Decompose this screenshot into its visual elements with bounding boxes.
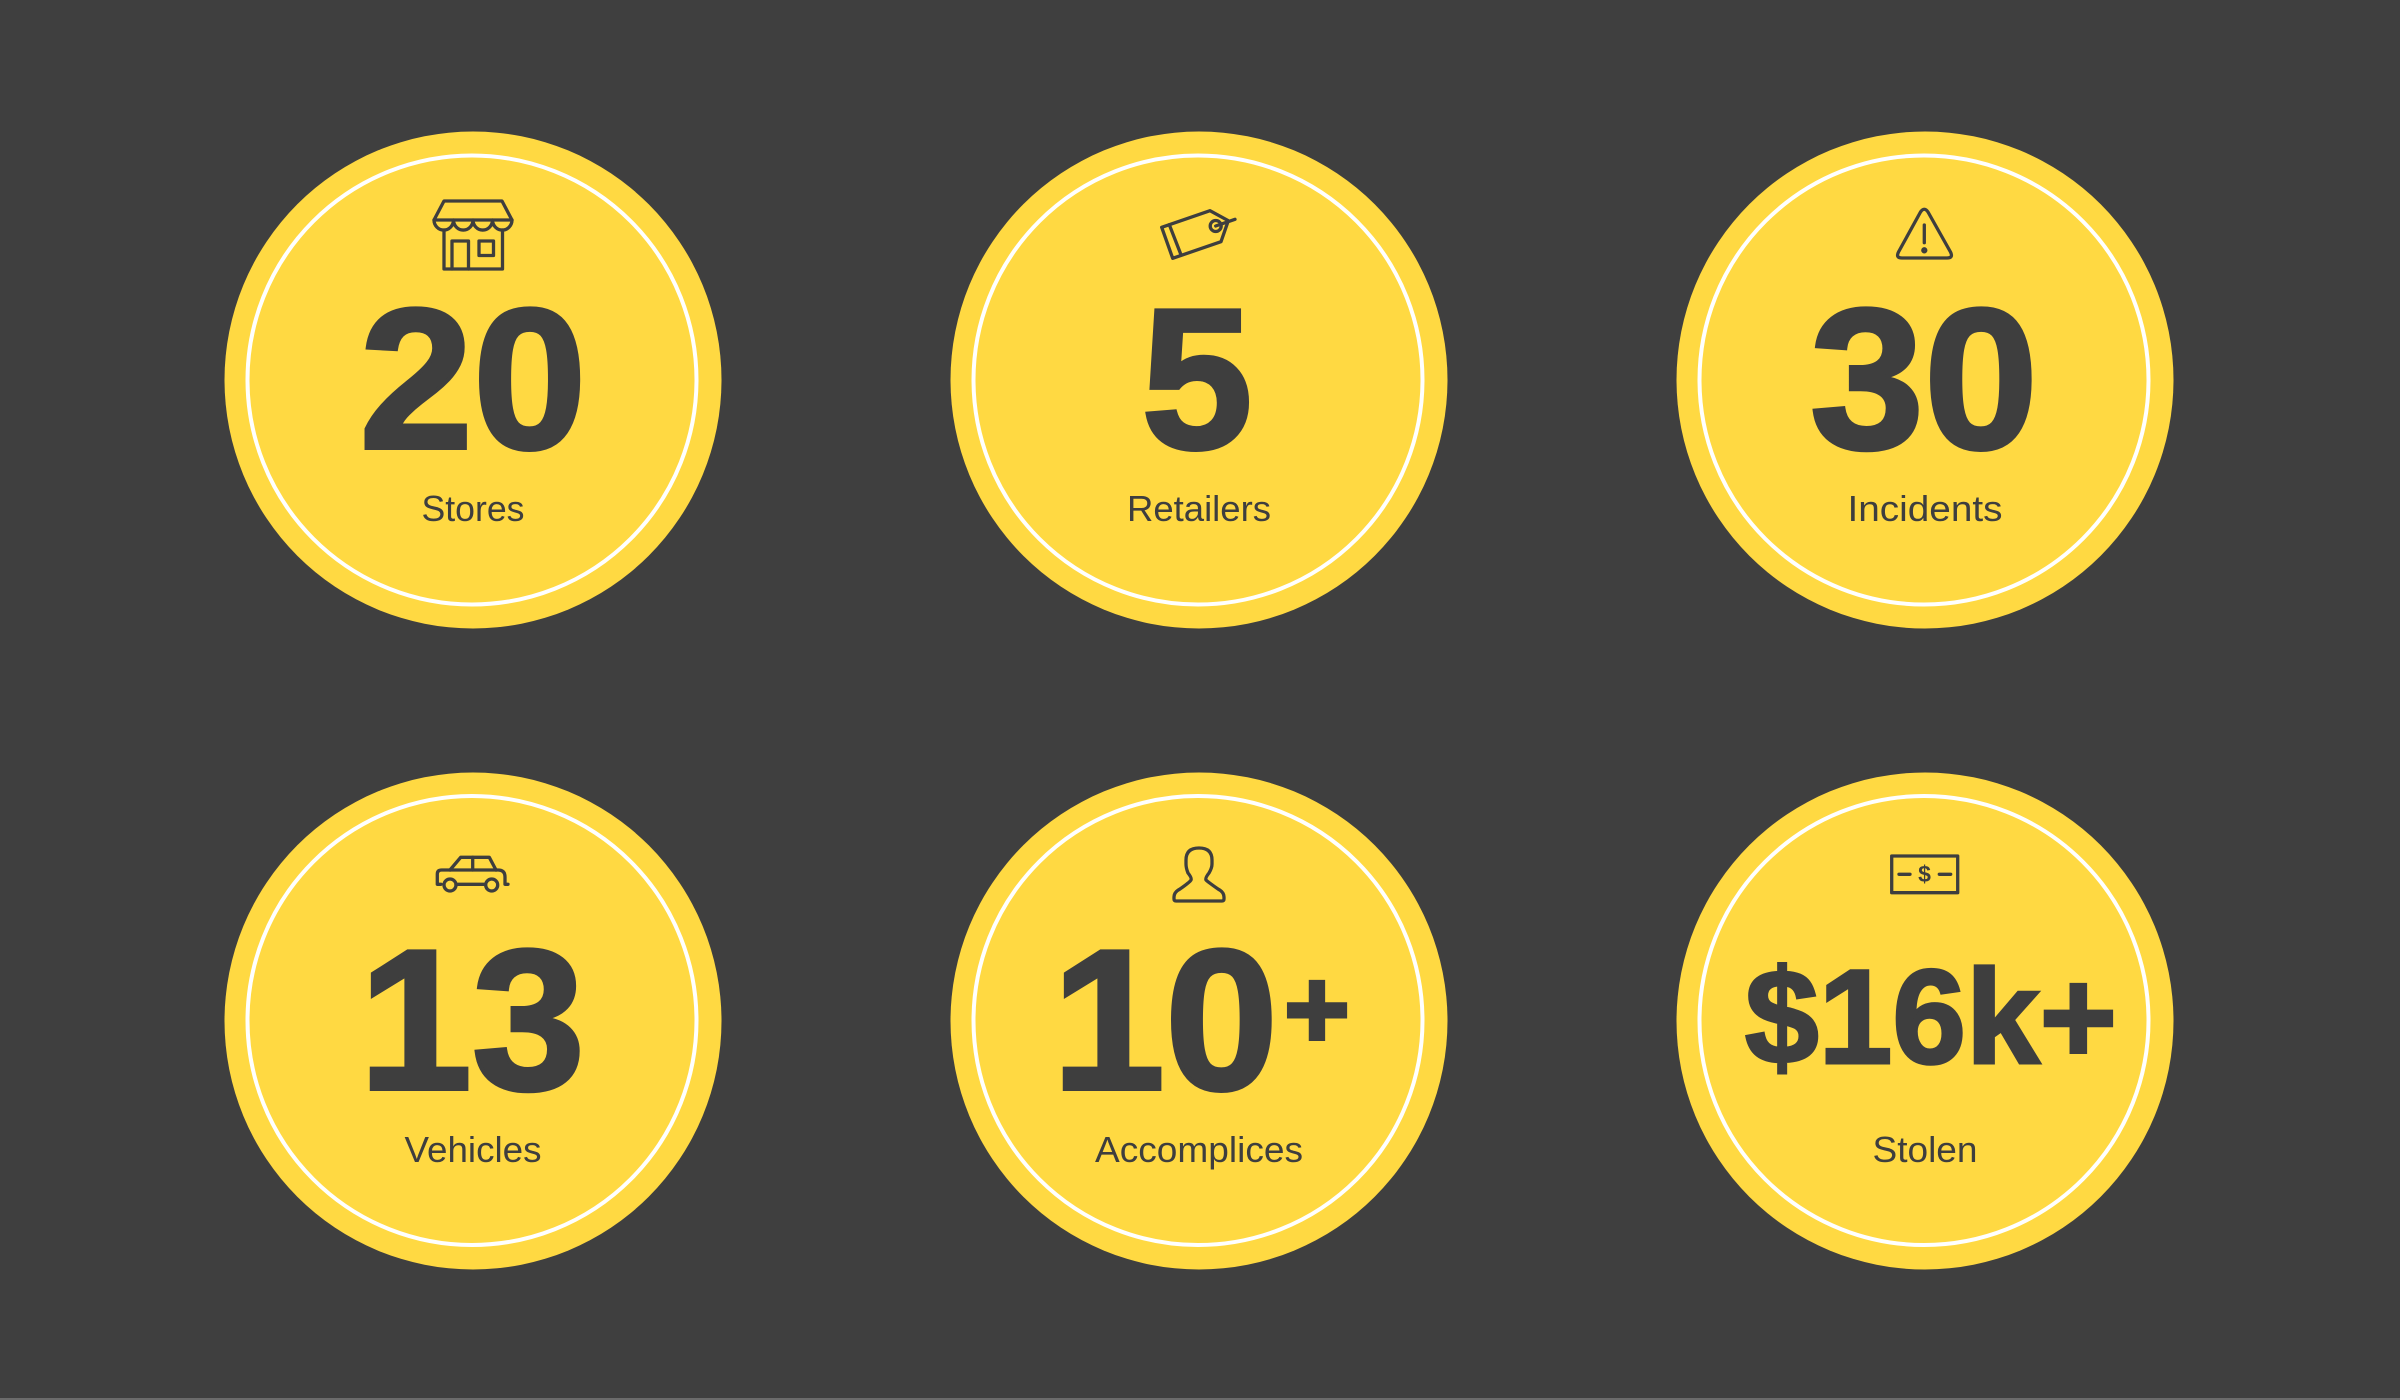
icon: banknote (1892, 856, 1958, 893)
number: 13: 13 (359, 909, 585, 1132)
number: 10 plus: + (1284, 947, 1350, 1072)
number: 10 plus: 10 (1052, 909, 1278, 1132)
panel: stolen (1676, 772, 2174, 1270)
icon: price tag (1162, 211, 1235, 258)
icon: banknote: $ (1918, 861, 1931, 887)
label: Stores: Stores (422, 488, 524, 529)
label: Incidents: Incidents (1848, 488, 2002, 529)
panel: vehicles (224, 772, 722, 1270)
label: Accomplices: Accomplices (1095, 1129, 1303, 1170)
number: 20: 20 (360, 268, 586, 491)
label: Stolen: Stolen (1872, 1129, 1978, 1170)
panel: accomplices (950, 772, 1448, 1270)
number: 5: 5 (1141, 268, 1253, 491)
panel: incidents (1676, 132, 2174, 628)
icon: warning triangle (1898, 209, 1951, 258)
label: Vehicles: Vehicles (404, 1129, 542, 1170)
icon: person (1174, 848, 1224, 901)
panel: retailers (950, 132, 1448, 628)
panel: stores (224, 132, 722, 628)
label: Retailers: Retailers (1127, 488, 1271, 529)
icon: storefront (434, 201, 512, 269)
icon: car (437, 857, 508, 891)
number: $16k+: $16k+ (1745, 943, 2117, 1092)
number: 30: 30 (1810, 268, 2038, 491)
